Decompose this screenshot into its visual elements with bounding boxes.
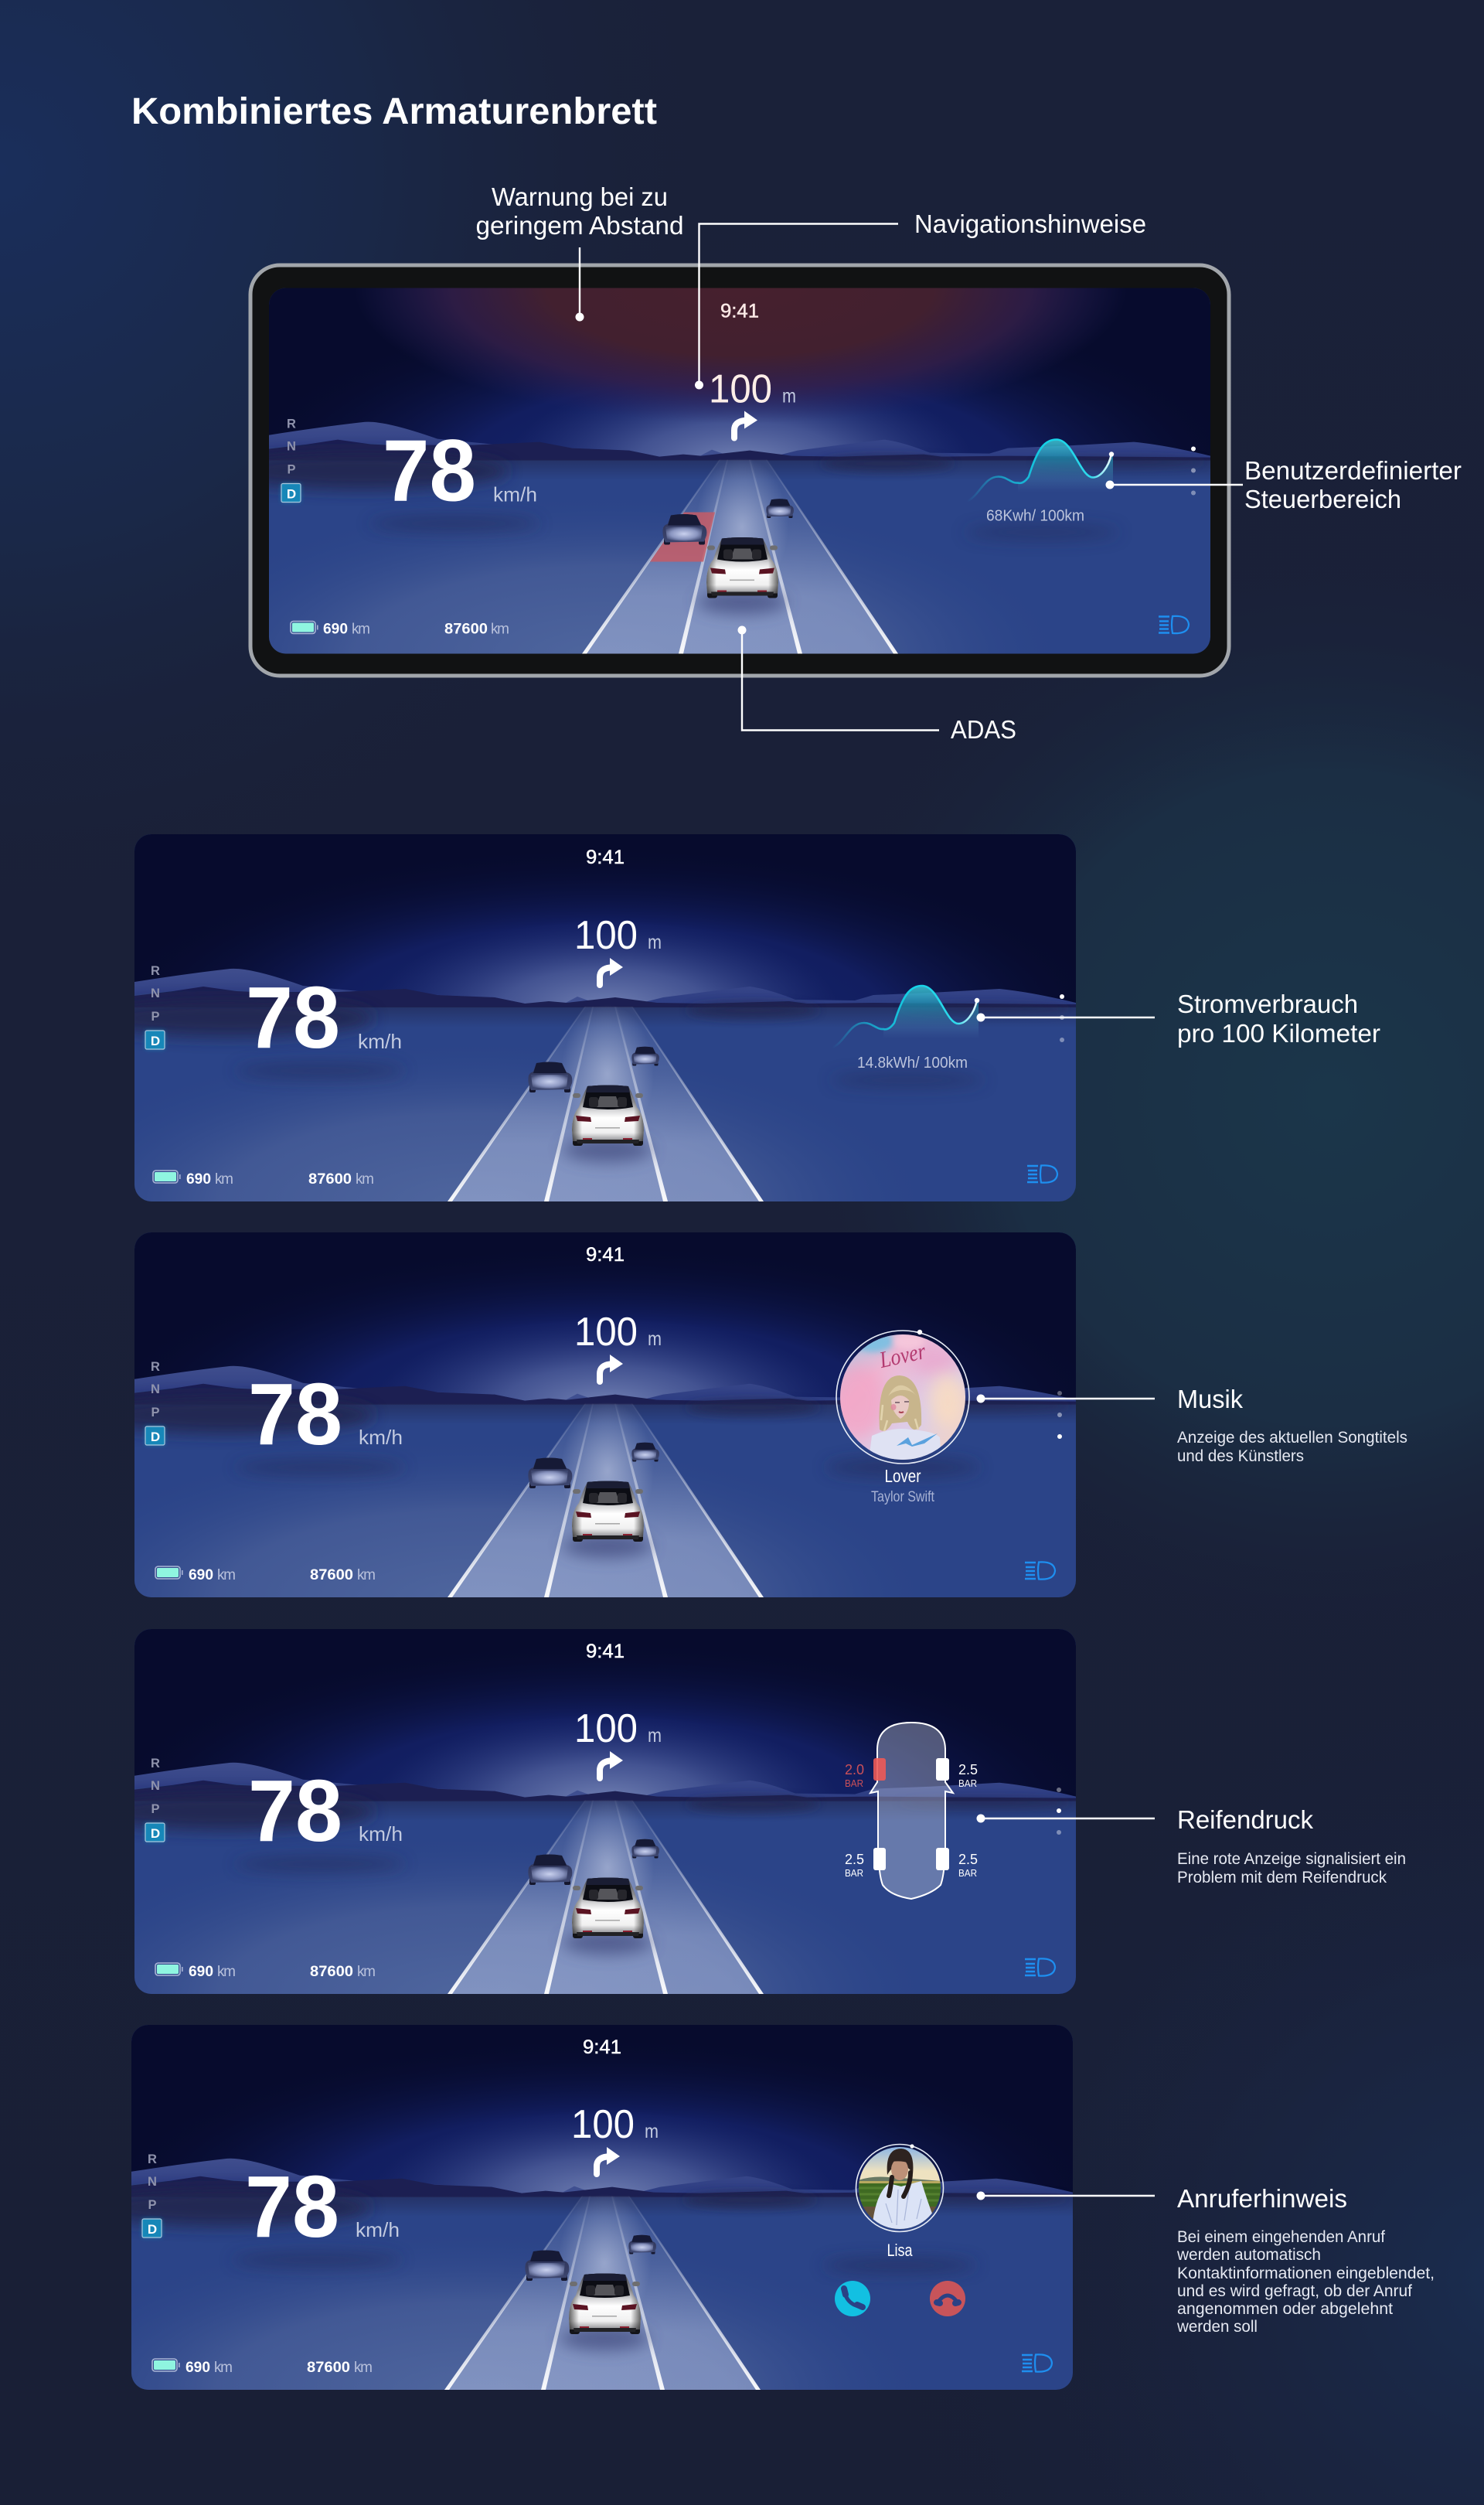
odometer <box>444 622 509 637</box>
gear selector: N <box>148 2175 157 2189</box>
odometer: 87600 <box>307 2360 350 2376</box>
main car <box>706 537 778 598</box>
navigation distance: m <box>648 1725 662 1747</box>
main car <box>572 1877 644 1938</box>
page dots <box>1057 1391 1062 1439</box>
odometer: km <box>356 1171 374 1188</box>
navigation distance: 100 <box>574 1706 638 1751</box>
headlight icon <box>1022 2354 1052 2372</box>
front right pressure <box>958 1761 978 1789</box>
clock: 9:41 <box>586 1244 625 1266</box>
rear left pressure: BAR <box>845 1867 863 1879</box>
gear selector: P <box>151 1010 160 1024</box>
chart shadow <box>965 524 1119 540</box>
callout: incoming call: Anruferhinweis <box>1177 2184 1347 2213</box>
contact shadow <box>822 2258 977 2273</box>
rear right pressure: 2.5 <box>958 1851 978 1867</box>
callout: navigation <box>695 210 1146 390</box>
callout: incoming call: Bei einem eingehenden Anruf <box>1177 2228 1385 2246</box>
panel: tire pressure <box>11 1629 1076 2163</box>
clock: 9:41 <box>720 300 759 322</box>
right car <box>631 1839 659 1859</box>
headlight icon <box>1159 616 1189 633</box>
left car <box>662 514 706 544</box>
battery range: 690 <box>189 1964 213 1980</box>
front left pressure: 2.0 <box>845 1761 864 1777</box>
clock: 9:41 <box>586 847 625 868</box>
page dots <box>1191 447 1196 495</box>
gear selector: D <box>287 487 296 501</box>
contact photo <box>856 2144 943 2231</box>
battery range: km <box>215 1171 233 1188</box>
navigation distance: 100 <box>709 366 772 411</box>
odometer: 87600 <box>308 1171 352 1188</box>
navigation distance: 100 <box>571 2102 635 2147</box>
battery range: 690 <box>186 2360 210 2376</box>
callout: power consumption: Stromverbrauch <box>1177 990 1358 1018</box>
callout: custom control area: Steuerbereich <box>1244 485 1401 513</box>
gear selector <box>145 964 165 1049</box>
red distance warning glow <box>376 288 1105 416</box>
album art: Lover <box>876 1338 928 1373</box>
callout: tire pressure: Reifendruck <box>1177 1805 1313 1834</box>
battery range: km <box>217 1567 236 1583</box>
panel: power consumption <box>11 834 1076 1372</box>
main car <box>569 2273 641 2334</box>
battery range <box>155 1963 236 1980</box>
rear left pressure <box>845 1851 864 1879</box>
callout: incoming call <box>977 2184 1435 2336</box>
rear left pressure: 2.5 <box>845 1851 864 1867</box>
battery range <box>291 622 370 637</box>
speed <box>248 1365 403 1463</box>
battery range: 690 <box>186 1171 211 1188</box>
callout: navigation: Navigationshinweise <box>914 210 1146 238</box>
odometer <box>310 1567 376 1583</box>
odometer: km <box>491 622 509 637</box>
speed: 78 <box>246 969 340 1066</box>
odometer: 87600 <box>310 1964 353 1980</box>
clock: 9:41 <box>586 1641 625 1662</box>
front left pressure <box>845 1761 864 1789</box>
gear selector: N <box>151 1382 160 1396</box>
callout: tire pressure: Problem mit dem Reifendruck <box>1177 1869 1387 1886</box>
gear selector: R <box>151 1360 160 1374</box>
song title: Lover <box>884 1466 921 1486</box>
speed <box>245 2158 400 2255</box>
gear selector <box>142 2152 162 2237</box>
speed: 78 <box>383 422 476 520</box>
clock: 9:41 <box>583 2036 621 2058</box>
panel: music <box>134 1232 1076 1597</box>
navigation distance: 100 <box>574 913 638 958</box>
gear selector <box>145 1360 165 1445</box>
gear selector <box>281 418 301 503</box>
navigation distance: m <box>648 932 662 953</box>
battery range <box>153 1171 233 1188</box>
gear selector: P <box>287 462 296 476</box>
left car <box>525 2250 569 2281</box>
battery range <box>152 2359 233 2376</box>
right car <box>766 499 794 518</box>
speed: km/h <box>359 1822 403 1846</box>
navigation distance: m <box>648 1328 662 1350</box>
accept call button <box>835 2281 870 2316</box>
front left pressure: BAR <box>845 1777 863 1789</box>
left car <box>528 1062 572 1092</box>
gear selector: P <box>151 1802 160 1816</box>
gear selector: D <box>151 1034 160 1048</box>
gear selector: R <box>151 1757 160 1771</box>
callout: incoming call: werden soll <box>1176 2318 1258 2336</box>
navigation distance: m <box>645 2121 659 2142</box>
decline call button <box>930 2281 965 2316</box>
right car <box>628 2235 656 2254</box>
gear selector: P <box>148 2198 157 2212</box>
rear right pressure <box>958 1851 978 1879</box>
left car <box>528 1458 572 1488</box>
callout: ADAS <box>737 626 1016 744</box>
speed: km/h <box>358 1030 402 1053</box>
consumption value: 14.8kWh/ 100km <box>857 1055 968 1072</box>
page dots <box>1057 1788 1061 1835</box>
odometer: 87600 <box>310 1567 353 1583</box>
odometer: 87600 <box>444 622 488 637</box>
speed: 78 <box>248 1762 342 1859</box>
red warning zone behind car <box>650 512 715 561</box>
callout: tire pressure: Eine rote Anzeige signalisiert ein <box>1177 1850 1406 1868</box>
speed: km/h <box>356 2218 400 2241</box>
turn arrow <box>734 411 757 438</box>
callout: incoming call: und es wird gefragt, ob der Anruf <box>1177 2282 1412 2300</box>
callout: ADAS: ADAS <box>951 715 1016 744</box>
panel: main dashboard device <box>249 263 1230 677</box>
artist: Taylor Swift <box>871 1489 935 1505</box>
callout: tire pressure <box>977 1805 1406 1886</box>
odometer: km <box>357 1964 376 1980</box>
gear selector: D <box>151 1430 160 1444</box>
callout: custom control area <box>1105 456 1462 513</box>
gear selector: N <box>287 439 296 453</box>
battery range: 690 <box>323 622 348 637</box>
speed: 78 <box>248 1365 342 1463</box>
callout: music: und des Künstlers <box>1177 1447 1304 1465</box>
speed <box>383 422 537 520</box>
energy chart <box>832 986 979 1048</box>
battery range <box>155 1566 236 1583</box>
gear selector: D <box>151 1826 160 1841</box>
callout: distance warning: Warnung bei zu <box>492 182 668 211</box>
speed <box>246 969 402 1066</box>
battery range: km <box>214 2360 233 2376</box>
headlight icon <box>1025 1958 1055 1976</box>
odometer <box>308 1171 374 1188</box>
title: Kombiniertes Armaturenbrett <box>131 91 657 132</box>
gear selector: N <box>151 1779 160 1793</box>
speed: km/h <box>359 1426 403 1449</box>
left car <box>528 1854 572 1885</box>
callout: distance warning: geringem Abstand <box>476 211 683 240</box>
odometer <box>310 1964 376 1980</box>
navigation distance: m <box>782 385 796 407</box>
front right pressure: BAR <box>958 1777 977 1789</box>
panel: incoming call <box>131 2025 1073 2390</box>
battery range: km <box>217 1964 236 1980</box>
gear selector: R <box>148 2152 157 2166</box>
battery range: 690 <box>189 1567 213 1583</box>
car outline with tires <box>845 1723 978 1899</box>
speed: 78 <box>245 2158 339 2255</box>
callout: incoming call: Kontaktinformationen eingeblendet, <box>1177 2265 1435 2282</box>
contact name: Lisa <box>887 2241 913 2260</box>
callout: incoming call: werden automatisch <box>1176 2246 1321 2264</box>
main car <box>572 1481 644 1542</box>
callout: incoming call: angenommen oder abgelehnt <box>1177 2300 1393 2318</box>
speed: km/h <box>493 482 537 506</box>
right car <box>631 1443 659 1462</box>
rear right pressure: BAR <box>958 1867 977 1879</box>
consumption value: 68Kwh/ 100km <box>986 507 1084 524</box>
headlight icon <box>1025 1562 1055 1580</box>
callout: power consumption <box>977 990 1380 1048</box>
callout: music <box>977 1385 1407 1465</box>
headlight icon <box>1027 1165 1057 1183</box>
callout: custom control area: Benutzerdefinierter <box>1244 456 1462 485</box>
callout: power consumption: pro 100 Kilometer <box>1177 1019 1380 1048</box>
speed <box>248 1762 403 1859</box>
callout: distance warning <box>476 182 683 322</box>
turn arrow <box>597 2147 620 2174</box>
battery range: km <box>352 622 370 637</box>
odometer <box>307 2360 373 2376</box>
gear selector: P <box>151 1406 160 1420</box>
turn arrow <box>600 1751 623 1778</box>
right car <box>631 1047 659 1066</box>
callout: music: Musik <box>1177 1385 1243 1413</box>
album art <box>830 1330 969 1464</box>
energy chart <box>967 439 1114 501</box>
navigation distance: 100 <box>574 1310 638 1355</box>
gear selector: N <box>151 987 160 1000</box>
turn arrow <box>600 958 623 985</box>
gear selector: D <box>148 2222 157 2237</box>
callout: music: Anzeige des aktuellen Songtitels <box>1177 1429 1407 1447</box>
turn arrow <box>600 1355 623 1382</box>
page dots <box>1060 994 1064 1042</box>
screen: main dashboard with warning <box>269 288 1210 654</box>
odometer: km <box>357 1567 376 1583</box>
front right pressure: 2.5 <box>958 1761 978 1777</box>
odometer: km <box>354 2360 373 2376</box>
album shadow <box>825 1458 980 1477</box>
gear selector: R <box>287 418 296 431</box>
main car <box>572 1086 644 1146</box>
chart shadow <box>830 1072 985 1088</box>
gear selector: R <box>151 964 160 978</box>
gear selector <box>145 1757 165 1842</box>
